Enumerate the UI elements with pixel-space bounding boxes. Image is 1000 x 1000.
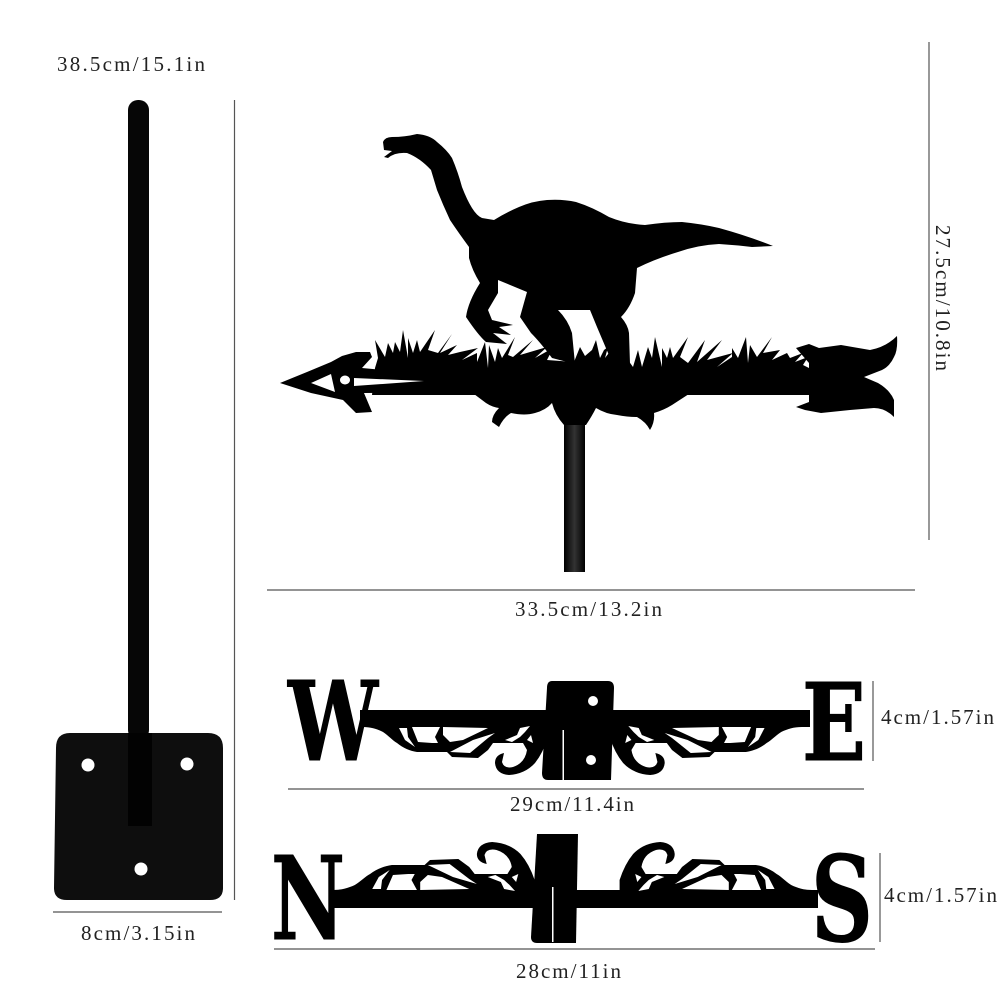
west-east direction arm — [287, 657, 866, 786]
centre plate — [531, 834, 578, 943]
left scroll ornament — [333, 842, 535, 891]
letter S: S — [811, 830, 873, 969]
plate holes and slit — [562, 696, 598, 780]
arrow eye — [339, 374, 351, 386]
letter E: E — [802, 661, 866, 786]
dimension: vane width line — [267, 589, 915, 591]
dimension: north-south height label: 4cm/1.57in — [884, 883, 998, 907]
dimension: base width line — [53, 911, 222, 913]
dimension: pole height line — [234, 100, 236, 900]
dimension: base width label: 8cm/3.15in — [81, 921, 196, 945]
dimension: north-south width line — [274, 948, 875, 950]
arm bar — [360, 710, 810, 727]
dimension: west-east height label: 4cm/1.57in — [881, 705, 994, 729]
arrow head — [280, 352, 470, 413]
dimension: west-east width label: 29cm/11.4in — [510, 792, 634, 816]
arrow cutouts — [311, 374, 424, 392]
dimension: west-east width line — [288, 788, 864, 790]
belly scroll ornament — [466, 375, 692, 430]
left scroll ornament — [363, 726, 548, 775]
vane support rod — [564, 420, 585, 572]
north-south direction arm — [271, 830, 873, 969]
dimension: north-south width label: 28cm/11in — [516, 959, 622, 983]
dimension: vane height line — [928, 42, 930, 540]
mounting pole with base plate — [54, 100, 223, 900]
plate slit — [552, 887, 554, 942]
centre plate — [542, 681, 614, 780]
dinosaur silhouette — [383, 134, 773, 364]
letter W: W — [287, 657, 379, 786]
right scroll ornament — [620, 842, 812, 891]
dimension: north-south height line — [879, 853, 881, 942]
letter N: N — [271, 832, 345, 967]
dimension: pole height label: 38.5cm/15.1in — [57, 52, 206, 76]
dimension: vane height label: 27.5cm/10.8in — [931, 225, 955, 372]
right scroll ornament — [610, 726, 802, 775]
arm bar — [333, 890, 818, 908]
dinosaur weathervane — [280, 134, 897, 572]
dimension: west-east height line — [872, 681, 874, 761]
grass band — [372, 330, 809, 395]
dimension: vane width label: 33.5cm/13.2in — [515, 597, 662, 621]
tail feather — [685, 336, 897, 417]
